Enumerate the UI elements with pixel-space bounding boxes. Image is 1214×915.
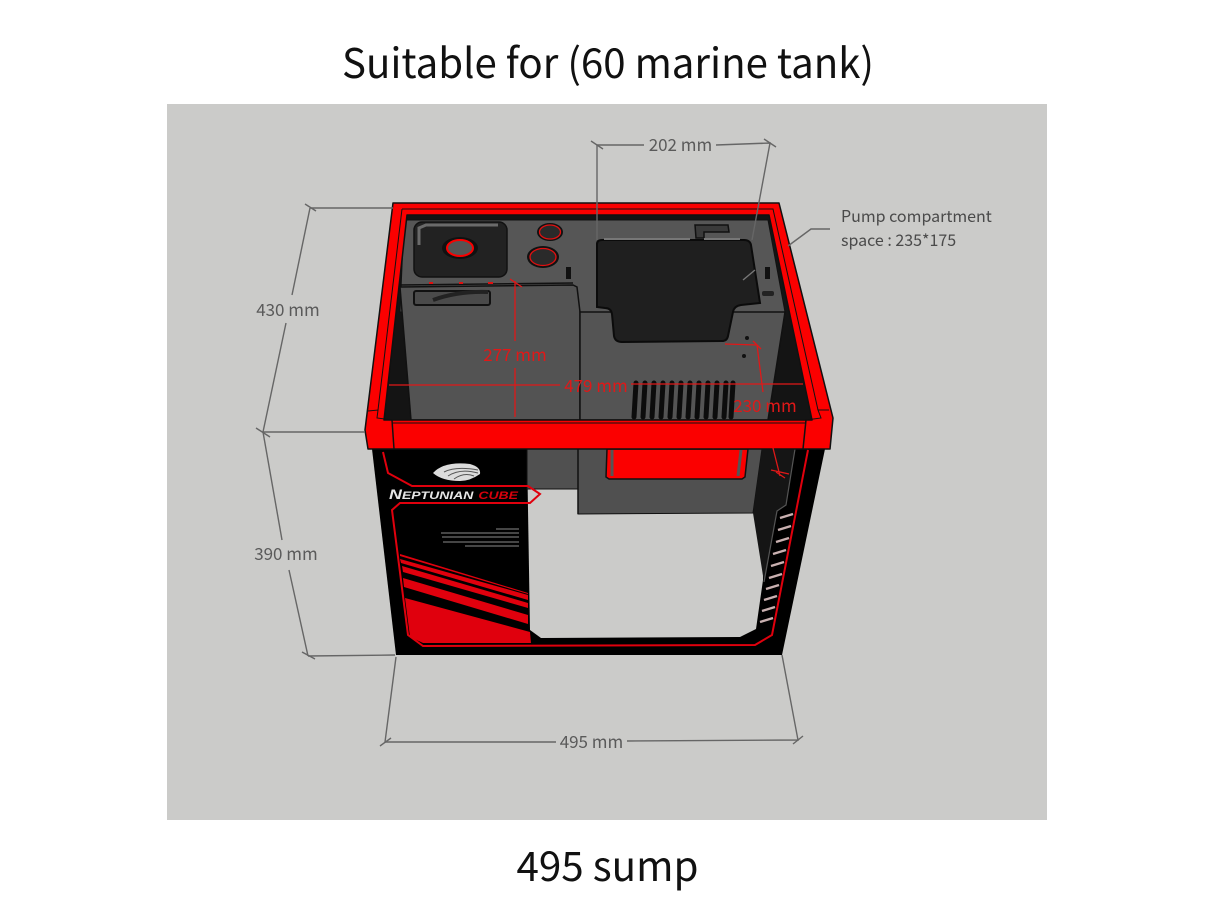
dimension: 202 mm	[591, 131, 776, 240]
front graphic: red outline	[383, 450, 808, 646]
round pipe holes	[527, 223, 563, 268]
red dimension: 230 mm: 230 mm	[733, 392, 797, 417]
callout: pump compartment: Pump compartment	[841, 203, 992, 227]
panel: gray drawing background	[167, 104, 1047, 820]
red dimension: 277 mm: 277 mm	[483, 341, 547, 366]
red handle panel	[606, 449, 748, 479]
red dimension: 230 mm	[725, 341, 797, 478]
title: Suitable for (60 marine tank)	[342, 30, 874, 90]
dimension: 390 mm: 390 mm	[254, 540, 318, 565]
dimension: 430 mm: 430 mm	[256, 296, 320, 321]
vertical comb slots	[634, 383, 733, 417]
pump compartment recess	[597, 240, 760, 342]
callout: pump compartment	[743, 203, 992, 280]
right chamber wall	[580, 312, 785, 420]
interior	[384, 213, 815, 421]
back inner wall	[527, 449, 762, 514]
overflow slot	[414, 291, 490, 305]
callout: pump compartment: space : 235*175	[841, 227, 956, 251]
dimension: 495 mm	[380, 655, 803, 753]
caption: 495 sump	[516, 833, 698, 893]
front opening	[527, 449, 763, 638]
top tab	[695, 225, 729, 238]
brand logo	[433, 463, 480, 481]
sump model	[365, 203, 833, 655]
dimension: 495 mm: 495 mm	[560, 728, 623, 753]
dimension: 202 mm: 202 mm	[649, 131, 712, 156]
cabinet body	[372, 449, 825, 655]
front panel fine print	[441, 529, 519, 546]
dimension: 390 mm	[254, 432, 395, 659]
front graphic: red stripes	[400, 554, 531, 643]
dimension: 430 mm	[256, 204, 393, 437]
side vent slats	[760, 514, 793, 622]
red dimension: 479 mm: 479 mm	[564, 372, 628, 397]
red dimension: 277 mm	[483, 279, 547, 417]
rear upper deck	[400, 220, 785, 312]
red top frame	[365, 203, 833, 449]
small side slots	[566, 267, 571, 279]
dark side wall	[753, 449, 795, 582]
red dots	[429, 282, 493, 284]
left chamber wall	[400, 285, 580, 420]
brand name: N EPTUNIAN CUBE	[389, 486, 519, 502]
square hatch	[414, 222, 507, 277]
